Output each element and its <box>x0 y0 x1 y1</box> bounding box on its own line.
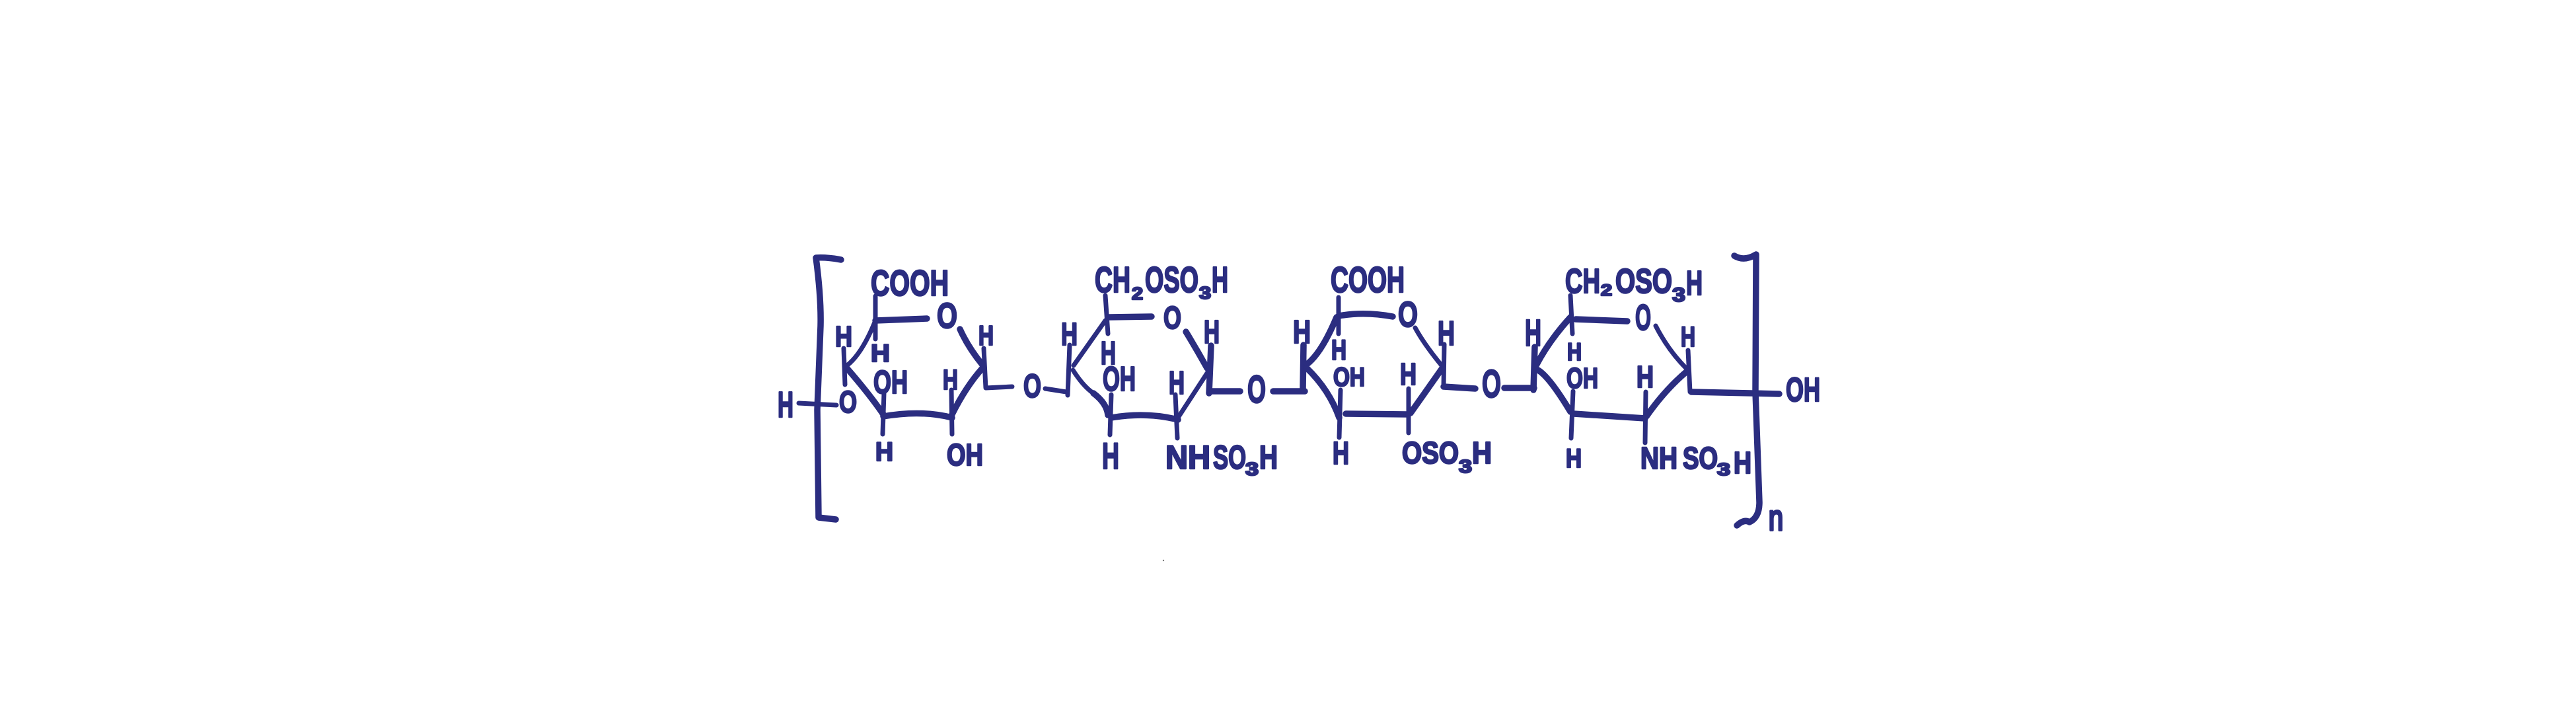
label NHSO3H: H <box>1734 445 1751 480</box>
ring 3 <box>1293 259 1492 477</box>
linkage bond 1 <box>1045 389 1066 392</box>
label H right: H <box>978 320 994 351</box>
label H lower inner: H <box>1637 360 1654 394</box>
label H left: H <box>1293 315 1311 350</box>
ring 4 bonds <box>1533 295 1779 443</box>
ring 4 <box>1525 262 1779 480</box>
terminal O: O <box>839 385 857 419</box>
label CH2OSO3H: OSO <box>1615 262 1672 301</box>
label H left: H <box>835 321 852 353</box>
label OH inner: OH <box>1103 360 1136 399</box>
label ring O: O <box>937 296 957 336</box>
small speck <box>1163 560 1164 561</box>
label NHSO3H: NH <box>1165 439 1210 476</box>
terminal OH: OH <box>1786 371 1820 408</box>
ring 1 bonds <box>844 296 1012 434</box>
label H bottom: H <box>1102 435 1119 477</box>
ring 2 bonds <box>1068 295 1240 438</box>
ring 1 <box>835 262 1012 472</box>
label CH2OSO3H: 3 <box>1672 284 1685 306</box>
right bracket <box>1734 254 1759 525</box>
label CH2OSO3H: H <box>1686 264 1703 303</box>
label CH2OSO3H: 2 <box>1132 284 1143 303</box>
linkage O 1: O <box>1023 367 1041 404</box>
label H lower inner: H <box>1169 365 1185 401</box>
label CH2OSO3H: 2 <box>1601 282 1612 299</box>
label COOH: COOH <box>871 262 949 303</box>
label H lower inner: H <box>943 364 958 396</box>
label NHSO3H: NH <box>1640 441 1677 475</box>
terminal H: H <box>778 384 793 425</box>
label H right: H <box>1681 321 1695 353</box>
label H lower inner: H <box>1400 357 1417 391</box>
label H bottom: H <box>1566 444 1582 473</box>
label H bottom: H <box>1333 436 1349 471</box>
label H bottom: H <box>875 438 893 467</box>
label NHSO3H: 3 <box>1717 459 1730 479</box>
label OH inner: OH <box>1566 362 1598 395</box>
left bracket <box>816 258 841 519</box>
label OH inner: OH <box>873 365 908 401</box>
label H right: H <box>1204 315 1220 350</box>
label OH inner: OH <box>1333 363 1365 392</box>
label H inner: H <box>871 340 890 367</box>
label ring O: O <box>1635 297 1651 338</box>
linkage bond 2 <box>1273 388 1305 395</box>
label OSO3H: H <box>1472 436 1492 470</box>
linkage O 3: O <box>1482 362 1501 406</box>
label CH2OSO3H: CH <box>1095 259 1130 300</box>
label CH2OSO3H: 3 <box>1199 283 1211 303</box>
label NHSO3H: H <box>1259 439 1278 476</box>
ring 3 bonds <box>1303 297 1475 438</box>
label ring O: O <box>1398 295 1418 334</box>
label NHSO3H: 3 <box>1245 459 1259 479</box>
label H inner: H <box>1331 334 1346 366</box>
label H left: H <box>1061 317 1078 352</box>
label CH2OSO3H: CH <box>1565 262 1600 301</box>
label H inner: H <box>1101 336 1116 371</box>
label OSO3H: 3 <box>1459 456 1472 477</box>
label H left: H <box>1525 312 1541 354</box>
label NHSO3H: SO <box>1213 439 1246 476</box>
label COOH: COOH <box>1331 259 1405 300</box>
linkage bond 3 <box>1504 385 1534 391</box>
label H inner: H <box>1567 338 1582 365</box>
label CH2OSO3H: OSO <box>1145 259 1198 300</box>
label ring O: O <box>1163 301 1181 336</box>
repeat subscript n: n <box>1769 498 1783 538</box>
ring 2 <box>1061 259 1278 479</box>
label OSO3H: OSO <box>1402 436 1459 470</box>
label NHSO3H: SO <box>1683 441 1718 475</box>
label CH2OSO3H: H <box>1212 259 1228 300</box>
label H right: H <box>1438 315 1455 353</box>
terminal bond <box>799 403 836 405</box>
label OH bottom: OH <box>947 438 983 472</box>
linkage O 2: O <box>1247 368 1266 411</box>
